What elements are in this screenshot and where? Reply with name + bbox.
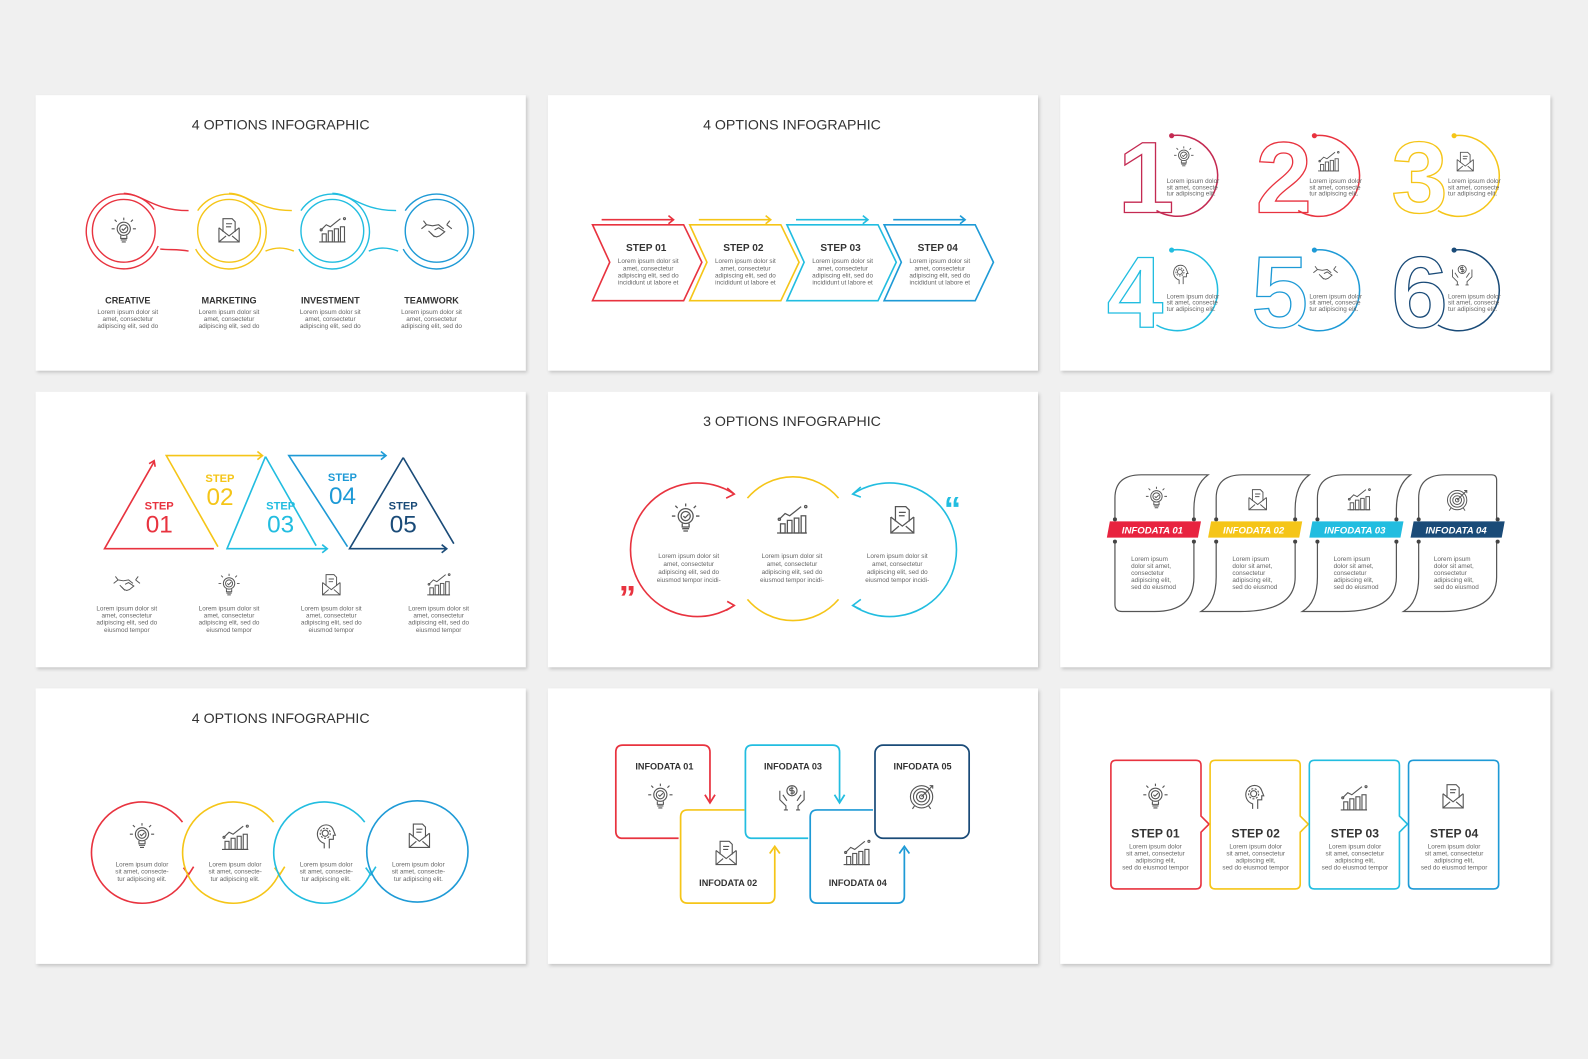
step labels: STEP: [145, 500, 174, 512]
step texts: Lorem ipsum dolor: [1129, 843, 1183, 850]
icons: [648, 784, 933, 865]
texts: eiusmod tempor incidi-: [657, 577, 721, 584]
texts: Lorem ipsum: [1131, 556, 1168, 563]
box 02: [681, 810, 780, 903]
step box 2: [1210, 760, 1308, 889]
step texts: incididunt ut labore et: [812, 279, 873, 286]
texts: adipiscing elit, sed do: [762, 569, 823, 576]
triangle 5: [350, 458, 454, 553]
step labels: 02: [206, 484, 233, 511]
texts: Lorem ipsum: [1334, 556, 1370, 563]
step texts: sed do eiusmod tempor: [1222, 865, 1290, 872]
box 04: [810, 810, 909, 903]
step texts: [1122, 826, 1488, 872]
step texts: Lorem ipsum dolor sit: [909, 258, 970, 265]
texts: adipiscing elit, sed do: [96, 620, 158, 627]
number 1: 1: [1118, 122, 1174, 235]
cyan arc: [853, 483, 956, 617]
step texts: adipiscing elit,: [1236, 858, 1276, 865]
number texts: tur adipiscing elit.: [1448, 190, 1497, 197]
panel: 4 overlapping circles: [36, 688, 526, 964]
texts: adipiscing elit, sed do: [658, 569, 720, 576]
step labels: 03: [267, 512, 294, 539]
texts: eiusmod tempor incidi-: [760, 577, 824, 584]
labels: Lorem ipsum dolor sit: [97, 309, 158, 316]
texts: Lorem ipsum dolor sit: [762, 553, 823, 560]
labels: [97, 296, 462, 330]
texts: Lorem ipsum: [1434, 556, 1471, 563]
banners: [1107, 521, 1505, 538]
step texts: sit amet, consectetur: [1126, 851, 1186, 858]
texts: sit amet, consecte-: [300, 869, 353, 876]
step labels: 05: [390, 512, 417, 539]
labels: INFODATA 01: [635, 761, 693, 771]
step texts: sit amet, consectetur: [1425, 851, 1484, 858]
step texts: adipiscing elit, sed do: [812, 272, 873, 279]
texts: dolor sit amet,: [1232, 563, 1273, 570]
triangle 4: [289, 452, 386, 547]
number 2: 2: [1256, 122, 1312, 235]
step texts: Lorem ipsum dolor sit: [618, 258, 679, 265]
box 03: [745, 745, 845, 838]
labels: INVESTMENT: [301, 296, 360, 306]
banners: INFODATA 03: [1324, 526, 1386, 537]
number texts: Lorem ipsum dolor: [1448, 294, 1502, 301]
number 6: 6: [1391, 236, 1448, 349]
step texts: adipiscing elit,: [1135, 858, 1176, 865]
banners: INFODATA 01: [1122, 526, 1183, 537]
panel: 3 options circles: [548, 392, 1038, 667]
number texts: tur adipiscing elit.: [1309, 190, 1359, 197]
number texts: Lorem ipsum dolor: [1309, 294, 1363, 301]
labels: MARKETING: [201, 296, 257, 306]
triangle 3: [227, 457, 327, 553]
texts: eiusmod tempor incidi-: [865, 577, 929, 584]
number texts: tur adipiscing elit.: [1167, 190, 1216, 197]
step texts: amet, consectetur: [623, 265, 674, 272]
texts: Lorem ipsum dolor sit: [96, 605, 157, 612]
texts: tur adipiscing elit.: [211, 876, 260, 883]
step texts: amet, consectetur: [817, 265, 869, 272]
chevrons: [593, 216, 993, 301]
icons: [672, 503, 914, 533]
texts: sed do eiusmod: [1334, 584, 1379, 591]
icons: [112, 218, 452, 242]
labels: amet, consectetur: [204, 316, 255, 323]
texts: sed do eiusmod: [1232, 584, 1278, 591]
number 4: 4: [1107, 236, 1163, 349]
labels: TEAMWORK: [404, 296, 459, 306]
step texts: Lorem ipsum dolor: [1428, 843, 1481, 850]
texts: amet, consectetur: [872, 561, 923, 568]
panel: numbers 1-6: [1060, 95, 1550, 371]
step texts: adipiscing elit, sed do: [618, 272, 679, 279]
number texts: Lorem ipsum dolor: [1167, 294, 1220, 301]
icons: [130, 823, 430, 849]
number texts: sit amet, consecte: [1167, 300, 1218, 307]
number texts: Lorem ipsum dolor: [1167, 178, 1220, 185]
step texts: sed do eiusmod tempor: [1122, 865, 1190, 872]
number texts: Lorem ipsum dolor: [1309, 178, 1363, 185]
step texts: sit amet, consectetur: [1226, 851, 1286, 858]
texts: Lorem ipsum dolor: [209, 862, 262, 869]
number texts: tur adipiscing elit.: [1309, 306, 1359, 313]
texts: amet, consectetur: [767, 561, 818, 568]
card outlines: [1115, 475, 1497, 612]
texts: Lorem ipsum dolor sit: [408, 605, 469, 612]
texts: amet, consectetur: [306, 613, 357, 620]
step box 1: [1111, 760, 1209, 889]
texts: Lorem ipsum dolor: [116, 862, 169, 869]
step labels: 04: [329, 483, 356, 510]
banners: INFODATA 02: [1223, 526, 1285, 537]
texts: dolor sit amet,: [1434, 563, 1474, 570]
panel: infodata boxes: [548, 688, 1038, 964]
step texts: Lorem ipsum dolor: [1229, 843, 1283, 850]
texts: Lorem ipsum dolor sit: [199, 605, 260, 612]
texts: eiusmod tempor: [309, 627, 355, 634]
chain of circles: [86, 193, 474, 269]
title: 4 OPTIONS INFOGRAPHIC: [703, 118, 881, 134]
texts: amet, consectetur: [413, 613, 465, 620]
number texts: tur adipiscing elit.: [1167, 306, 1216, 313]
step texts: STEP 01: [1131, 826, 1180, 840]
texts: Lorem ipsum: [1232, 556, 1269, 563]
panel: step boxes: [1060, 688, 1550, 964]
step texts: sit amet, consectetur: [1326, 851, 1385, 858]
step labels: 01: [146, 512, 173, 539]
icons: [1143, 784, 1463, 810]
step box 4: [1409, 760, 1499, 889]
texts: [96, 605, 470, 634]
step texts: adipiscing elit,: [1335, 858, 1375, 865]
icons: [114, 574, 450, 595]
step texts: adipiscing elit, sed do: [909, 272, 971, 279]
labels: Lorem ipsum dolor sit: [199, 309, 260, 316]
step texts: STEP 03: [820, 243, 861, 254]
triangle 1: [105, 461, 214, 549]
step texts: adipiscing elit,: [1434, 858, 1474, 865]
texts: sit amet, consecte-: [208, 869, 262, 876]
step box 3: [1309, 760, 1408, 889]
step labels: STEP: [389, 500, 418, 512]
texts: [115, 862, 446, 883]
title: 4 OPTIONS INFOGRAPHIC: [192, 711, 370, 727]
icons: [1146, 487, 1467, 511]
texts: adipiscing elit,: [1434, 577, 1474, 584]
number 5: [1252, 236, 1360, 349]
texts: sed do eiusmod: [1131, 584, 1176, 591]
texts: adipiscing elit, sed do: [199, 620, 260, 627]
texts: Lorem ipsum dolor: [392, 862, 446, 869]
step labels: STEP: [266, 500, 296, 512]
labels: adipiscing elit, sed do: [401, 323, 462, 330]
panel: infodata banners: [1060, 392, 1550, 667]
step texts: STEP 04: [1430, 826, 1479, 840]
labels: adipiscing elit, sed do: [97, 323, 159, 330]
texts: adipiscing elit,: [1334, 577, 1374, 584]
texts: amet, consectetur: [102, 613, 153, 620]
texts: tur adipiscing elit.: [394, 876, 443, 883]
step texts: [618, 243, 971, 286]
texts: adipiscing elit,: [1232, 577, 1273, 584]
step texts: Lorem ipsum dolor sit: [715, 258, 776, 265]
title: 4 OPTIONS INFOGRAPHIC: [192, 118, 370, 134]
texts: eiusmod tempor: [416, 627, 462, 634]
icons: [1174, 146, 1473, 285]
title: 3 OPTIONS INFOGRAPHIC: [703, 414, 881, 430]
labels: amet, consectetur: [103, 316, 154, 323]
labels: INFODATA 03: [764, 761, 822, 771]
labels: amet, consectetur: [406, 316, 458, 323]
texts: adipiscing elit, sed do: [867, 569, 928, 576]
number 6: [1391, 236, 1499, 349]
labels: INFODATA 05: [894, 761, 952, 771]
step texts: amet, consectetur: [915, 265, 966, 272]
texts: consectetur: [1334, 570, 1367, 577]
texts: eiusmod tempor: [104, 627, 150, 634]
labels: Lorem ipsum dolor sit: [401, 309, 462, 316]
step texts: STEP 03: [1331, 826, 1379, 840]
texts: adipiscing elit, sed do: [408, 620, 470, 627]
step texts: incididunt ut labore et: [910, 279, 970, 286]
texts: sit amet, consecte-: [115, 869, 169, 876]
texts: Lorem ipsum dolor sit: [867, 553, 928, 560]
panel: 4 options circles: [36, 95, 526, 371]
number texts: sit amet, consecte: [1309, 184, 1361, 191]
step texts: sed do eiusmod tempor: [1421, 865, 1488, 872]
step texts: STEP 01: [626, 243, 667, 254]
step labels: STEP: [205, 473, 235, 485]
number texts: Lorem ipsum dolor: [1448, 178, 1502, 185]
panel: chevron steps: [548, 95, 1038, 371]
triangle 2: [166, 452, 262, 547]
labels: [635, 761, 952, 888]
texts: [657, 553, 929, 584]
step labels: STEP: [328, 472, 358, 484]
number texts: sit amet, consecte: [1448, 184, 1500, 191]
number texts: sit amet, consecte: [1309, 300, 1361, 307]
texts: Lorem ipsum dolor: [300, 862, 353, 869]
texts: dolor sit amet,: [1131, 563, 1171, 570]
texts: tur adipiscing elit.: [117, 876, 167, 883]
number texts: sit amet, consecte: [1448, 300, 1500, 307]
number 4: [1107, 236, 1218, 349]
texts: consectetur: [1131, 570, 1165, 577]
step texts: incididunt ut labore et: [618, 279, 679, 286]
labels: INFODATA 04: [829, 878, 888, 888]
step texts: Lorem ipsum dolor: [1329, 843, 1382, 850]
number texts: [1167, 178, 1502, 313]
texts: amet, consectetur: [204, 613, 255, 620]
labels: Lorem ipsum dolor sit: [300, 309, 361, 316]
texts: consectetur: [1434, 570, 1468, 577]
step texts: STEP 02: [723, 243, 764, 254]
yellow arc: [747, 477, 839, 621]
quote marks: ”: [619, 579, 636, 617]
step texts: STEP 02: [1232, 826, 1280, 840]
texts: sit amet, consecte-: [392, 869, 445, 876]
texts: [1131, 556, 1479, 591]
step texts: adipiscing elit, sed do: [715, 272, 776, 279]
box 01: [616, 745, 715, 838]
number 5: 5: [1252, 236, 1308, 349]
number texts: tur adipiscing elit.: [1448, 306, 1497, 313]
panel: triangle steps: [36, 392, 526, 667]
step texts: Lorem ipsum dolor sit: [812, 258, 873, 265]
texts: Lorem ipsum dolor sit: [301, 605, 362, 612]
red arc: [631, 483, 734, 617]
labels: adipiscing elit, sed do: [300, 323, 361, 330]
number texts: sit amet, consecte: [1167, 184, 1218, 191]
texts: tur adipiscing elit.: [302, 876, 351, 883]
texts: amet, consectetur: [663, 561, 715, 568]
step texts: sed do eiusmod tempor: [1322, 865, 1389, 872]
number 3: 3: [1391, 122, 1448, 235]
texts: Lorem ipsum dolor sit: [658, 553, 719, 560]
step texts: STEP 04: [918, 243, 958, 254]
number 1: [1118, 122, 1218, 235]
labels: amet, consectetur: [305, 316, 356, 323]
number 3: [1391, 122, 1499, 235]
labels: adipiscing elit, sed do: [199, 323, 260, 330]
quote marks: “: [944, 490, 961, 528]
quote marks: [619, 490, 961, 617]
labels: INFODATA 02: [699, 878, 757, 888]
step texts: amet, consectetur: [720, 265, 772, 272]
number 2: [1256, 122, 1360, 235]
step labels: [145, 472, 418, 539]
texts: sed do eiusmod: [1434, 584, 1479, 591]
texts: consectetur: [1232, 570, 1266, 577]
texts: adipiscing elit, sed do: [301, 620, 362, 627]
texts: eiusmod tempor: [206, 627, 253, 634]
labels: CREATIVE: [105, 296, 151, 306]
box 05: [875, 745, 969, 838]
texts: dolor sit amet,: [1334, 563, 1374, 570]
banners: INFODATA 04: [1426, 526, 1487, 537]
texts: adipiscing elit,: [1131, 577, 1171, 584]
step texts: incididunt ut labore et: [715, 279, 776, 286]
